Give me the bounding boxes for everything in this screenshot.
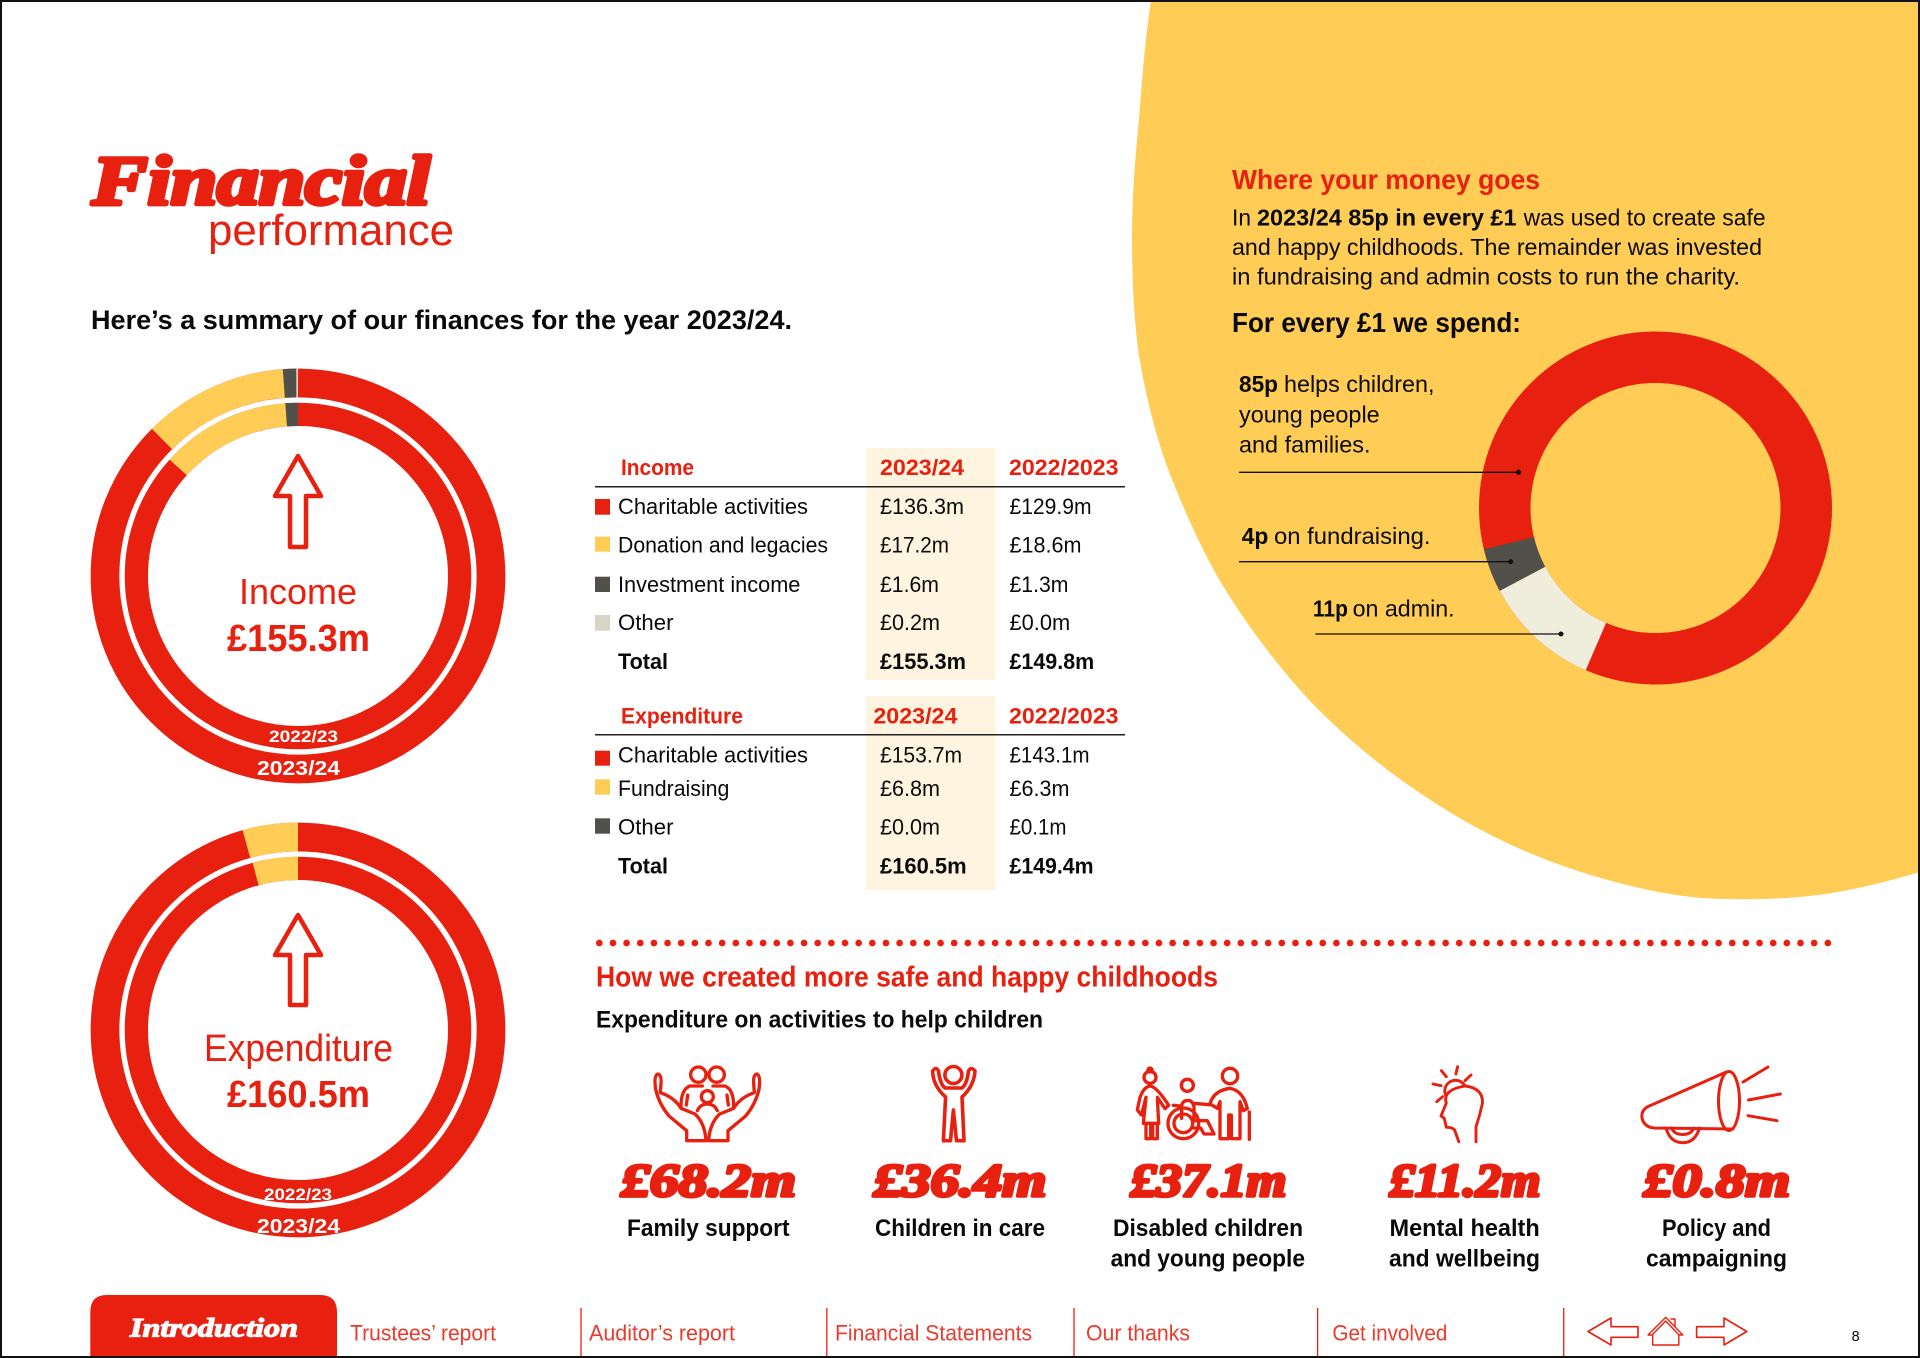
page number: 8 [1852, 1328, 1860, 1345]
row: expenditure total: Total [618, 854, 668, 879]
nav tab: introduction: Introduction [129, 1314, 298, 1343]
icon: previous arrow [1588, 1318, 1638, 1345]
row: income total: Total [618, 649, 668, 674]
callout: 85p [1239, 371, 1521, 475]
row: other income: £0.0m [1010, 610, 1070, 635]
income total [227, 571, 370, 660]
row: investment income [595, 572, 1068, 597]
expenditure total [204, 1028, 393, 1116]
row: other income: £0.2m [880, 610, 940, 635]
callout: 85p: helps children, [1284, 371, 1434, 397]
footer navigation [90, 1295, 1860, 1358]
callout: 4p: on fundraising. [1274, 523, 1430, 549]
section heading: childhoods: How we created more safe and happy childhoods [596, 962, 1218, 994]
row: charitable activities spend: £153.7m [880, 743, 962, 768]
icon: child with raised arms [933, 1066, 975, 1141]
yellow background blob [1132, 0, 1920, 899]
nav links: Get involved [1332, 1321, 1447, 1346]
icon: megaphone [1642, 1067, 1780, 1143]
callout: 11p: on admin. [1353, 596, 1455, 622]
row: charitable activities: £129.9m [1010, 494, 1092, 519]
callout: 85p: and families. [1239, 432, 1370, 458]
stat: mental health [1388, 1067, 1540, 1272]
donut chart: income: 2023/24 [257, 758, 341, 780]
row: other spend: £0.1m [1010, 815, 1066, 840]
table: expenditure: Expenditure [621, 703, 743, 728]
row: income total: £149.8m [1010, 649, 1094, 674]
row: expenditure total: £149.4m [1010, 854, 1094, 879]
body text: in fundraising and admin costs to run the charity. [1232, 264, 1740, 290]
icon: family with wheelchair [1137, 1068, 1249, 1139]
donut chart: income [105, 383, 491, 780]
row: other spend: £0.0m [880, 815, 940, 840]
row: other spend [595, 815, 1066, 840]
row: other income [595, 610, 1070, 635]
stat: mental health: Mental health [1390, 1215, 1540, 1242]
row: expenditure total [618, 854, 1094, 879]
callout: 4p [1239, 523, 1513, 564]
stat: mental health: £11.2m [1388, 1155, 1540, 1207]
nav links [350, 1308, 1564, 1356]
row: donation and legacies: Donation and legacies [618, 533, 828, 558]
row: charitable activities [595, 494, 1092, 519]
intro heading: Here’s a summary of our finances for the year 2023/24. [91, 305, 792, 335]
table: expenditure: 2023/24 [873, 703, 958, 728]
title: Financial [91, 143, 431, 220]
row: donation and legacies [595, 533, 1082, 558]
row: income total: £155.3m [880, 649, 966, 674]
nav links: Financial Statements [835, 1321, 1032, 1346]
donut chart: expenditure: 2022/23 [264, 1185, 332, 1204]
row: charitable activities: Charitable activities [618, 494, 808, 519]
callout: 85p: 85p [1239, 371, 1278, 397]
stat: disabled children: £37.1m [1129, 1155, 1286, 1207]
table: income [595, 448, 1125, 680]
stat: family support: £68.2m [620, 1155, 796, 1207]
row: investment income: £1.6m [880, 572, 939, 597]
nav links: Trustees’ report [350, 1321, 496, 1346]
table: income: 2022/2023 [1009, 455, 1118, 480]
row: charitable activities spend: £143.1m [1010, 743, 1090, 768]
arrow: income up [275, 456, 321, 547]
title: performance [208, 206, 454, 255]
stat: disabled children: Disabled children [1113, 1215, 1303, 1242]
callout: 4p: 4p [1242, 523, 1268, 549]
row: donation and legacies: £17.2m [880, 533, 949, 558]
stat: policy and campaigning: £0.8m [1642, 1155, 1790, 1207]
stat: disabled children [1111, 1068, 1305, 1272]
table: income: 2023/24 [880, 455, 964, 480]
callout: 11p [1313, 596, 1564, 636]
title [91, 143, 454, 255]
row: charitable activities: £136.3m [880, 494, 964, 519]
panel: where your money goes [1232, 164, 1806, 659]
section subheading: Expenditure on activities to help children [596, 1006, 1043, 1034]
donut chart: expenditure: 2023/24 [257, 1216, 341, 1238]
panel heading: Where your money goes [1232, 164, 1540, 195]
stat: children in care: Children in care [875, 1215, 1045, 1242]
stat: children in care [872, 1066, 1046, 1242]
stat: family support: Family support [627, 1215, 790, 1242]
callout: 85p: young people [1239, 402, 1380, 428]
table: income: Income [621, 455, 694, 480]
income total: Income [239, 571, 357, 612]
donut chart: every £1 [1505, 357, 1806, 659]
stat: policy and campaigning [1642, 1067, 1790, 1272]
icon: head with sun [1433, 1067, 1483, 1142]
stat: children in care: £36.4m [872, 1155, 1046, 1207]
row: charitable activities spend: Charitable activities [618, 743, 808, 768]
row: investment income: Investment income [618, 572, 800, 597]
table: expenditure: 2022/2023 [1009, 703, 1118, 728]
row: charitable activities spend [595, 743, 1090, 768]
nav links: Our thanks [1086, 1321, 1190, 1346]
row: expenditure total: £160.5m [880, 854, 967, 879]
body text: was used to create safe [1523, 204, 1766, 230]
body text [1232, 204, 1766, 290]
row: other income: Other [618, 610, 674, 635]
row: investment income: £1.3m [1010, 572, 1068, 597]
icon: hands holding family [655, 1067, 760, 1141]
icon: home [1648, 1317, 1683, 1345]
callout: 11p: 11p [1313, 596, 1348, 622]
row: other spend: Other [618, 815, 674, 840]
row: fundraising: £6.8m [880, 776, 940, 801]
body text: 2023/24 85p in every £1 [1257, 204, 1516, 230]
row: fundraising [595, 776, 1070, 801]
stat: family support [620, 1067, 796, 1242]
table: expenditure [595, 696, 1125, 890]
row: fundraising: £6.3m [1010, 776, 1070, 801]
stat: policy and campaigning: Policy and [1662, 1215, 1771, 1242]
stat: disabled children: and young people [1111, 1246, 1305, 1272]
arrow: expenditure up [275, 915, 321, 1005]
expenditure total: Expenditure [204, 1028, 393, 1070]
nav tab: introduction [90, 1295, 337, 1358]
stat: policy and campaigning: campaigning [1646, 1246, 1787, 1272]
row: fundraising: Fundraising [618, 776, 729, 801]
icon: next arrow [1697, 1318, 1747, 1345]
stat: mental health: and wellbeing [1389, 1246, 1540, 1272]
nav links: Auditor’s report [589, 1321, 735, 1346]
body text: and happy childhoods. The remainder was invested [1232, 234, 1762, 260]
donut chart: expenditure [105, 837, 491, 1238]
subheading: For every £1 we spend: [1232, 307, 1521, 338]
row: donation and legacies: £18.6m [1010, 533, 1082, 558]
income total: £155.3m [227, 618, 370, 660]
row: income total [618, 649, 1094, 674]
donut chart: income: 2022/23 [269, 727, 338, 746]
body text: In [1232, 204, 1251, 230]
expenditure total: £160.5m [227, 1074, 370, 1116]
